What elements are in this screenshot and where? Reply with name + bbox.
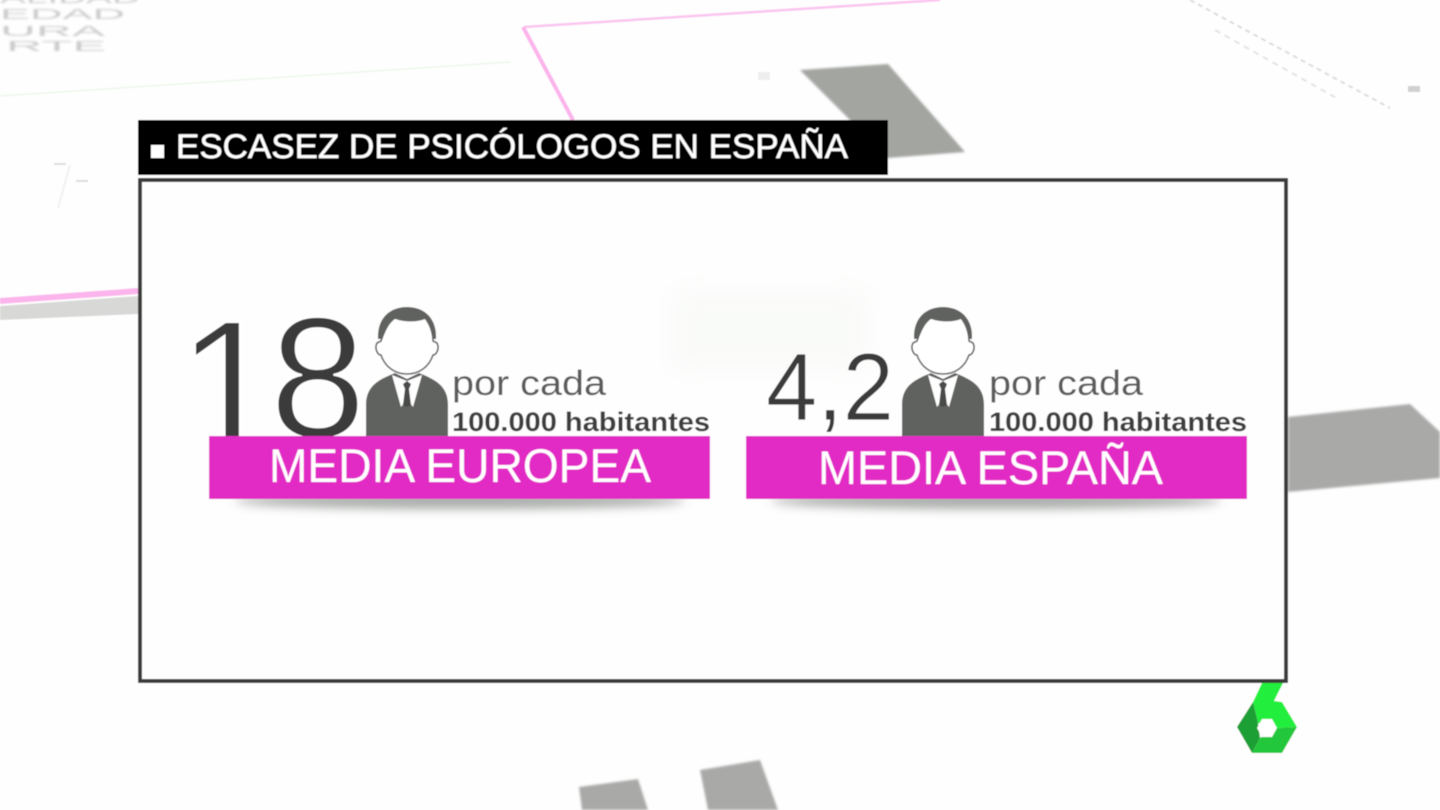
label: MEDIA EUROPEA (269, 439, 652, 492)
block: media españa (746, 307, 1247, 509)
number 18: 1 (176, 281, 282, 493)
por cada: por cada (452, 364, 607, 403)
main panel (140, 180, 1286, 681)
block: media europea (176, 281, 710, 509)
pink bar (746, 436, 1247, 499)
100.000 habitantes: 100.000 habitantes (989, 407, 1247, 437)
logo: la Sexta 6 (1237, 683, 1297, 753)
100.000 habitantes: 100.000 habitantes (452, 407, 710, 437)
title text: ESCASEZ DE PSICÓLOGOS EN ESPAÑA (176, 127, 848, 166)
number 18: 8 (270, 282, 366, 474)
number 18 (196, 317, 358, 437)
background: faint lettering: EDAD (0, 6, 125, 23)
icon: person (366, 307, 448, 437)
icon: person (902, 307, 984, 437)
title bar (138, 120, 888, 175)
background: faint lettering: RTE (6, 38, 106, 55)
shadow under pink bar (771, 493, 1221, 509)
label: MEDIA ESPAÑA (818, 441, 1164, 494)
title bullet (151, 145, 164, 158)
por cada: por cada (989, 364, 1144, 403)
background: faint lettering (0, 0, 140, 55)
background: faint lettering: URA (0, 23, 105, 40)
number 4,2: 4,2 (766, 334, 894, 441)
pink bar (209, 436, 710, 499)
shadow under pink bar (235, 493, 685, 509)
